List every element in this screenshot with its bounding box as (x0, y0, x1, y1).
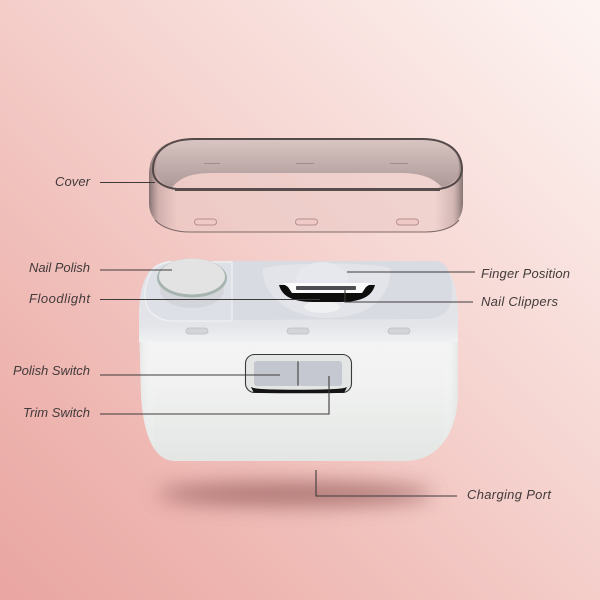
callout: trim switch: Trim Switch (23, 405, 90, 420)
switch assembly (246, 354, 352, 393)
trim switch button (298, 361, 342, 386)
cover front slots (194, 219, 418, 225)
cover rim (153, 139, 462, 190)
callout: charging port: Charging Port (467, 487, 552, 502)
cover top slots (204, 162, 408, 164)
callout: trim switch (23, 376, 329, 420)
callout: polish switch: Polish Switch (13, 363, 90, 378)
polish disc (157, 258, 227, 308)
cover interior (156, 140, 459, 187)
callout: charging port (316, 470, 552, 502)
top lip band (139, 261, 458, 342)
lip slots (186, 328, 410, 334)
callout: finger position: Finger Position (481, 266, 570, 281)
callout: nail clippers (345, 290, 558, 309)
main housing (139, 261, 458, 461)
transparent cover (149, 139, 463, 232)
cover lower shell (149, 139, 463, 232)
recessed top panel (232, 261, 452, 320)
callout: nail clippers: Nail Clippers (481, 294, 558, 309)
polish tray (145, 262, 232, 321)
clipper mouth (279, 283, 375, 302)
polish switch button (254, 361, 298, 386)
callout: cover (55, 174, 155, 189)
callout: nail polish: Nail Polish (29, 260, 90, 275)
device shadow (157, 482, 433, 506)
callout: floodlight: Floodlight (29, 291, 91, 306)
callout: cover: Cover (55, 174, 91, 189)
finger cradle (263, 264, 390, 318)
device body (139, 258, 458, 461)
